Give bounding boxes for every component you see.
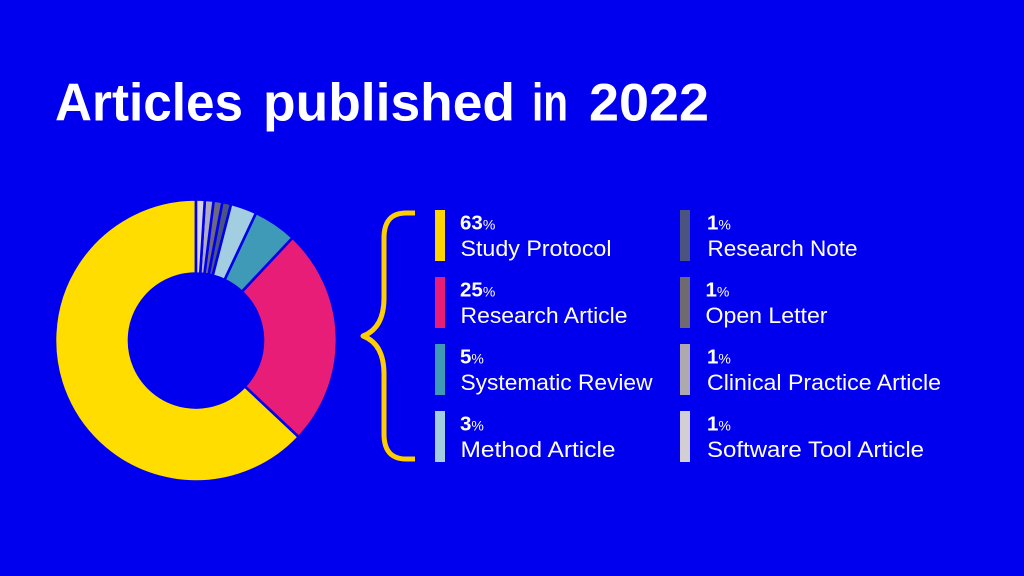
- legend item: Research Article: 25%: [460, 278, 495, 302]
- legend item: Systematic Review: [435, 344, 653, 395]
- brace connecting chart to legend: [363, 213, 415, 459]
- legend item: Software Tool Article: 1%: [707, 412, 731, 436]
- title: 2022: [589, 74, 709, 132]
- legend item: Method Article: [435, 411, 616, 462]
- legend item: Clinical Practice Article: 1%: [707, 346, 731, 368]
- slice: Study Protocol 63%: [55, 200, 299, 482]
- legend item: Research Article: [435, 277, 628, 328]
- legend item: Study Protocol: [435, 210, 612, 261]
- legend item: Software Tool Article: [680, 411, 924, 462]
- legend item: Research Note: [680, 210, 858, 261]
- legend item: Open Letter: 1%: [706, 278, 729, 302]
- slice: Research Note 1%: [209, 202, 231, 276]
- legend item: Study Protocol: Study Protocol: [460, 236, 612, 261]
- legend item: Software Tool Article: Software Tool Article: [707, 437, 924, 462]
- slice: Systematic Review 5%: [225, 213, 293, 292]
- legend item: Study Protocol: 63%: [460, 212, 495, 234]
- legend: [435, 210, 941, 462]
- slice: Method Article 3%: [213, 204, 256, 280]
- legend item: Method Article: 3%: [460, 412, 484, 436]
- legend item: Systematic Review: 5%: [460, 346, 484, 368]
- legend item: Clinical Practice Article: Clinical Practice Article: [707, 370, 941, 395]
- legend item: Method Article: Method Article: [460, 437, 616, 462]
- legend item: Open Letter: Open Letter: [706, 303, 828, 328]
- legend item: Research Article: Research Article: [460, 303, 628, 328]
- slice: Open Letter 1%: [204, 201, 222, 275]
- slice: Clinical Practice Article 1%: [200, 200, 214, 274]
- title: in: [532, 74, 568, 132]
- legend item: Clinical Practice Article: [680, 344, 941, 395]
- legend item: Systematic Review: Systematic Review: [460, 370, 653, 395]
- legend item: Open Letter: [680, 277, 828, 328]
- title: published: [263, 74, 515, 132]
- legend item: Research Note: Research Note: [708, 236, 858, 261]
- slice: Research Article 25%: [242, 238, 337, 437]
- legend item: Research Note: 1%: [707, 212, 731, 234]
- slice: Software Tool Article 1%: [196, 200, 205, 274]
- donut chart: [55, 200, 337, 482]
- title: Articles: [55, 74, 243, 132]
